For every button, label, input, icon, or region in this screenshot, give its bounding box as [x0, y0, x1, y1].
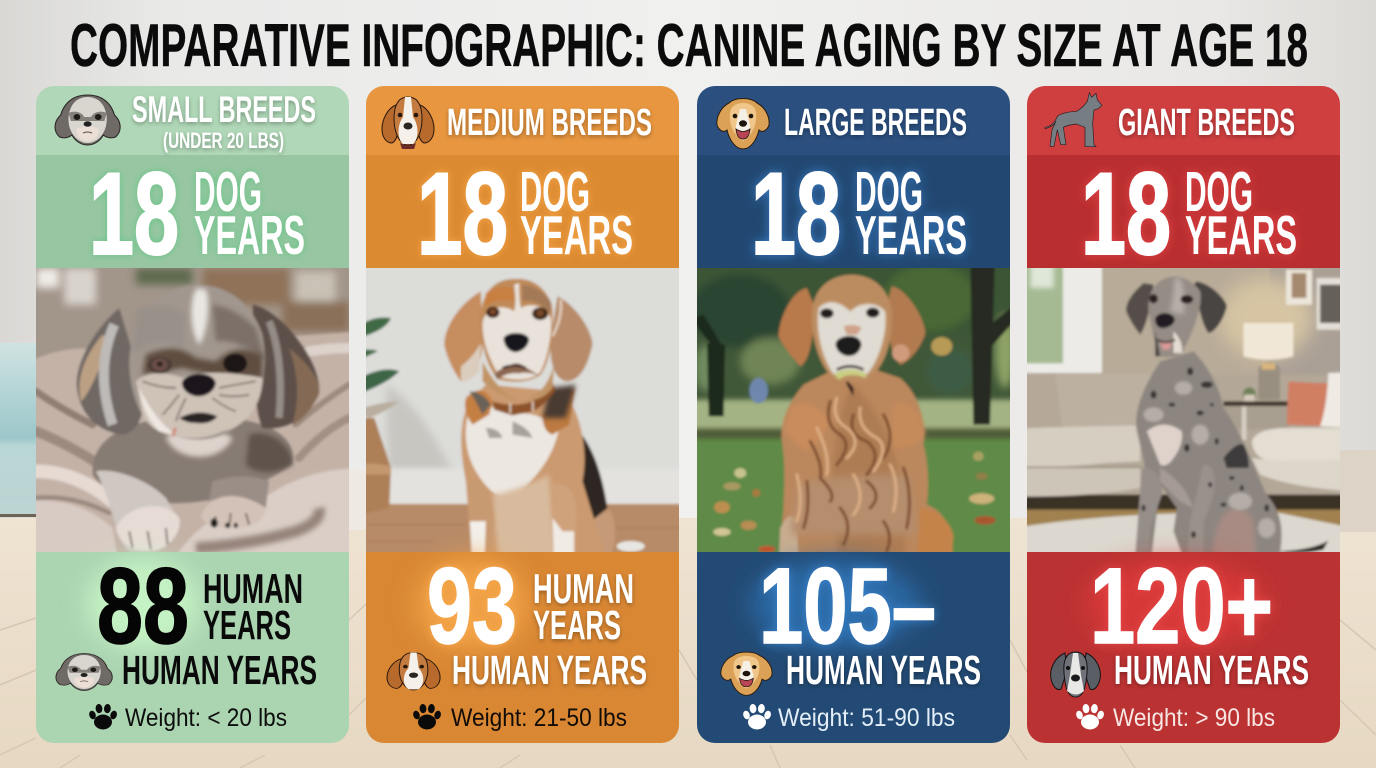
- photo: golden retriever in park: [697, 268, 1010, 552]
- weight: giant: Weight: > 90 lbs: [1113, 704, 1275, 732]
- icon: great dane full body: [1045, 93, 1102, 147]
- panel background: small breeds: [36, 86, 349, 743]
- human years: medium: 93: [427, 545, 517, 666]
- photo: great dane in living room: [1027, 268, 1340, 552]
- dog years: giant: 18: [1081, 148, 1171, 279]
- heading: medium breeds: MEDIUM BREEDS: [447, 102, 652, 144]
- photo: beagle: [366, 268, 679, 552]
- icon: shih tzu footer: [56, 653, 112, 690]
- human years: small: [87, 545, 303, 666]
- heading: large breeds: LARGE BREEDS: [784, 102, 967, 144]
- panel: giant breeds: [1014, 86, 1353, 743]
- icon: beagle footer: [387, 653, 440, 690]
- label: human years small: HUMAN YEARS: [122, 647, 317, 693]
- icon: paw large: [742, 704, 772, 730]
- human years: giant: 120+: [1090, 545, 1273, 666]
- human years: large: 105–: [759, 545, 936, 666]
- weight: large: Weight: 51-90 lbs: [778, 704, 955, 732]
- human years: medium: [416, 545, 634, 666]
- human years: small: YEARS: [203, 602, 291, 648]
- dog years: small: DOG: [194, 160, 262, 224]
- dog years: medium: 18: [417, 148, 508, 279]
- panel background: giant breeds: [1027, 86, 1340, 743]
- dog years: medium: YEARS: [520, 204, 633, 266]
- panel: large breeds: [684, 86, 1023, 743]
- icon: dane footer: [1051, 652, 1100, 697]
- label: human years medium: HUMAN YEARS: [452, 647, 647, 693]
- icon: paw medium: [412, 704, 442, 730]
- heading: small breeds: [132, 89, 316, 153]
- panel background: medium breeds: [366, 86, 679, 743]
- icon: shih tzu header: [55, 95, 120, 145]
- icon: golden footer: [721, 652, 772, 695]
- icon: golden header: [717, 98, 769, 149]
- icon: paw small: [88, 704, 118, 730]
- dog years: giant: DOG: [1185, 160, 1253, 224]
- dog years: small: [89, 148, 305, 279]
- human years: medium: HUMAN: [533, 565, 634, 612]
- photo: shih tzu on blanket: [36, 268, 349, 552]
- human years: medium: YEARS: [533, 602, 621, 648]
- dog years: giant: [1081, 148, 1297, 279]
- icon: beagle header: [382, 97, 434, 149]
- icon: paw giant: [1075, 704, 1105, 730]
- panel: medium breeds: [353, 86, 692, 743]
- weight: medium: Weight: 21-50 lbs: [451, 704, 627, 732]
- dog years: small: 18: [89, 148, 179, 279]
- dog years: large: [751, 148, 967, 279]
- panel: small breeds: [23, 86, 362, 743]
- weight: small: Weight: < 20 lbs: [125, 704, 287, 732]
- human years: small: HUMAN: [203, 565, 303, 612]
- dog years: large: DOG: [855, 160, 923, 224]
- dog years: small: YEARS: [194, 204, 305, 266]
- dog years: medium: DOG: [520, 160, 590, 224]
- human years: small: 88: [97, 545, 189, 666]
- heading: small breeds: (UNDER 20 LBS): [163, 128, 284, 153]
- dog years: large: YEARS: [855, 204, 967, 266]
- dog years: medium: [417, 148, 633, 279]
- panel background: large breeds: [697, 86, 1010, 743]
- dog years: giant: YEARS: [1185, 204, 1297, 266]
- dog years: large: 18: [751, 148, 841, 279]
- heading: small breeds: SMALL BREEDS: [132, 89, 316, 130]
- label: human years large: HUMAN YEARS: [786, 647, 981, 693]
